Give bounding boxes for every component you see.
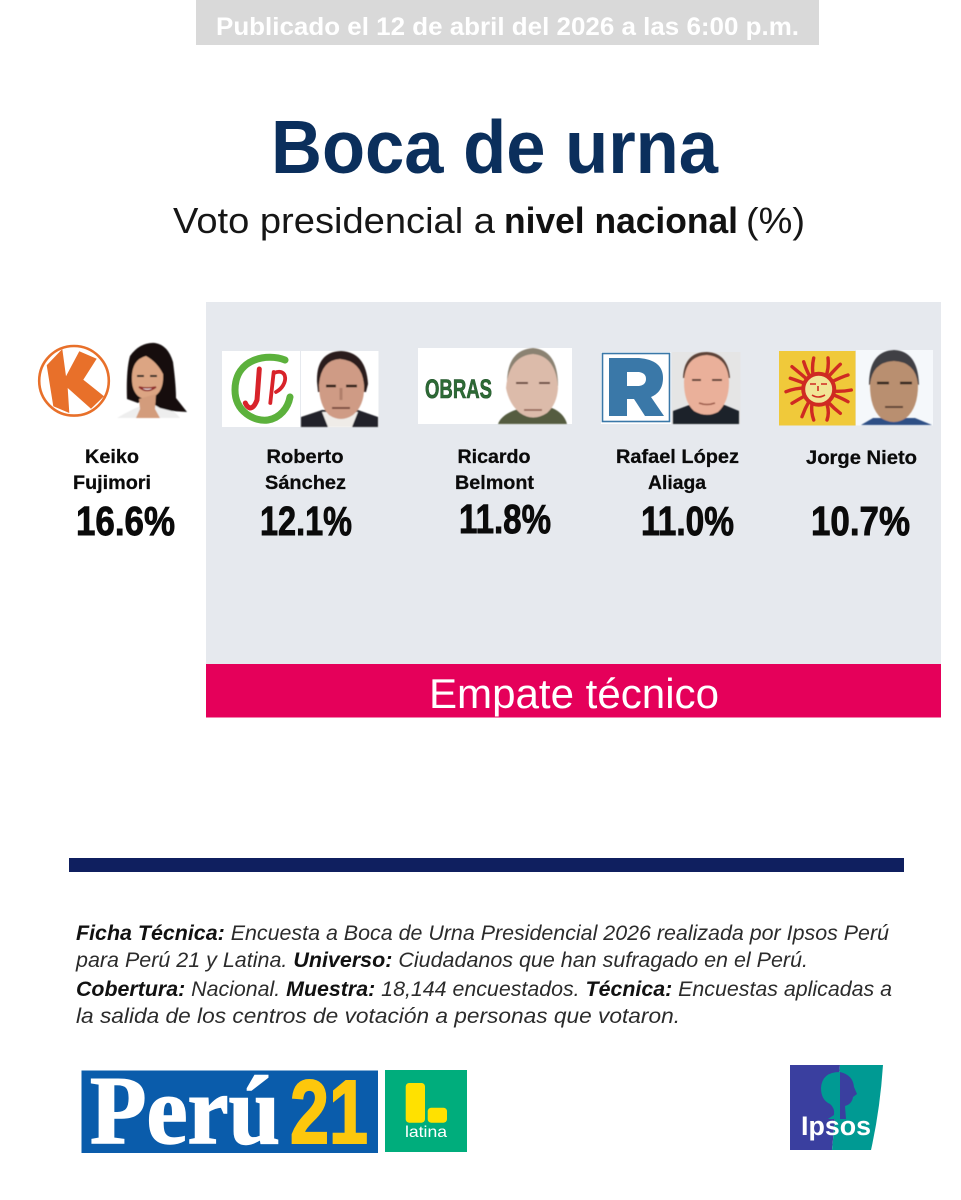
logo: Latina: latina: [405, 1124, 447, 1141]
candidate: Rafael López Aliaga: [601, 352, 740, 544]
logo: Ipsos: Ipsos: [801, 1111, 871, 1141]
logo: Perú 21: Perú: [90, 1057, 280, 1164]
logo: Ipsos: [790, 1065, 883, 1150]
technical note: Cobertura: Nacional. Muestra: 18,144 encuestados. Técnica: Encuestas aplicadas a: [76, 978, 892, 1001]
candidate: Ricardo Belmont: [418, 348, 572, 542]
name: Belmont: [455, 473, 535, 494]
subtitle: (%): [746, 200, 805, 241]
photo: Rafael López Aliaga: [672, 352, 740, 424]
banner: empate técnico: [206, 664, 941, 718]
subtitle: nivel nacional: [504, 200, 738, 241]
publication date banner: [196, 0, 819, 45]
name: [73, 447, 151, 494]
photo: Jorge Nieto: [856, 350, 933, 426]
photo: Keiko Fujimori: [117, 343, 187, 418]
candidate: Roberto Sánchez: [222, 351, 378, 544]
percentage: 16.6%: [76, 498, 175, 544]
candidate: Keiko Fujimori: [39, 343, 187, 544]
photo: Roberto Sánchez: [301, 351, 378, 427]
icon: Obras logo and photo: [418, 348, 572, 424]
name: Fujimori: [73, 473, 151, 494]
logo: Perú 21: [82, 1057, 378, 1164]
name: Jorge Nieto: [806, 448, 917, 469]
name: [265, 447, 346, 494]
divider bar: [69, 858, 904, 872]
subtitle: [173, 200, 805, 241]
name: [616, 447, 739, 494]
logo: Perú 21: 21: [290, 1063, 368, 1163]
icon: Renovación Popular R logo: [601, 352, 671, 424]
percentage: 11.0%: [641, 498, 734, 544]
icon: Partido del Buen Gobierno sun logo: [779, 351, 856, 426]
icon: Juntos por el Perú logo: [222, 351, 300, 427]
subtitle: Voto presidencial a: [173, 200, 496, 241]
name: Roberto: [266, 447, 344, 468]
name: [455, 447, 535, 494]
percentage: 12.1%: [260, 498, 352, 544]
percentage: 10.7%: [811, 498, 910, 544]
title: Boca de urna: [271, 105, 719, 189]
name: Ricardo: [458, 447, 530, 468]
panel: technical tie background: [206, 302, 941, 664]
name: Keiko: [85, 447, 139, 468]
name: Rafael López: [616, 447, 739, 468]
name: Sánchez: [265, 473, 346, 494]
technical note: la salida de los centros de votación a personas que votaron.: [76, 1005, 680, 1028]
technical note: para Perú 21 y Latina. Universo: Ciudadanos que han sufragado en el Perú.: [75, 949, 808, 972]
publication date banner: Publicado el 12 de abril del 2026 a las 6:00 p.m.: [216, 13, 799, 41]
icon: Fuerza Popular K logo: [39, 346, 109, 416]
candidate: Jorge Nieto: [779, 350, 933, 544]
banner: empate técnico: Empate técnico: [429, 670, 719, 717]
logo: Latina: [385, 1070, 467, 1152]
icon: Obras logo and photo: OBRAS: [425, 374, 492, 404]
technical note: Ficha Técnica: Encuesta a Boca de Urna Presidencial 2026 realizada por Ipsos Perú: [76, 922, 889, 945]
technical note: [75, 922, 892, 1028]
name: Aliaga: [648, 473, 706, 494]
percentage: 11.8%: [459, 496, 551, 542]
